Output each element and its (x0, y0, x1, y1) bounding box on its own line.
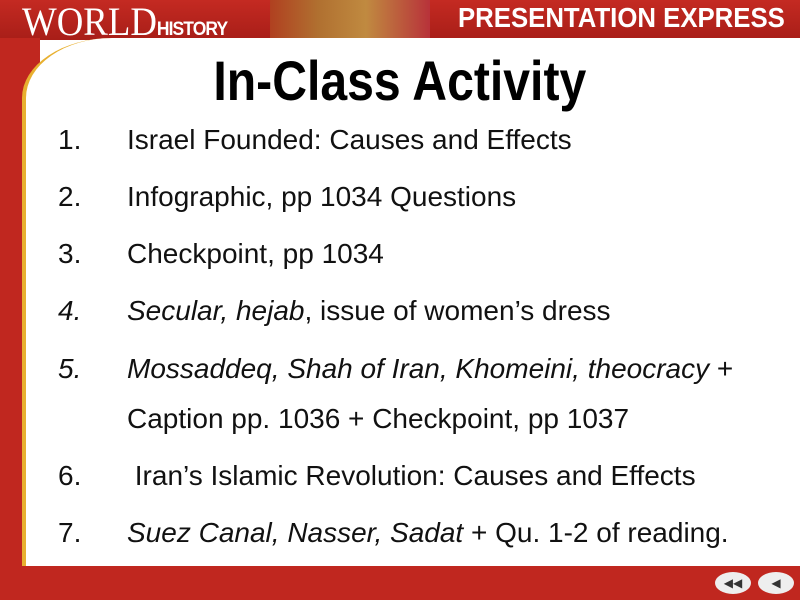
list of activities: Israel Founded: Causes and Effects (127, 124, 572, 155)
list of activities: Secular, hejab, issue of women’s dress (127, 295, 611, 326)
logo: World History: WORLDHISTORY (22, 0, 227, 44)
item 4: 4. (58, 295, 81, 326)
item 1 (58, 124, 572, 155)
item 5: 5. (58, 353, 81, 384)
item 1: 1. (58, 124, 81, 155)
button: back: ◀ (771, 576, 781, 590)
list of activities: Caption pp. 1036 + Checkpoint, pp 1037 (127, 403, 629, 434)
item 7: 7. (58, 517, 81, 548)
item 6: 6. (58, 460, 81, 491)
button: back (758, 572, 794, 594)
header image band (270, 0, 430, 40)
header label: Presentation Express: PRESENTATION EXPRESS (458, 2, 785, 33)
item 7 (58, 517, 729, 548)
item 2: 2. (58, 181, 81, 212)
bottom bar (0, 566, 800, 600)
item 2 (58, 181, 516, 212)
button: rewind (715, 572, 751, 594)
button: rewind: ◀◀ (724, 576, 742, 590)
list of activities: Infographic, pp 1034 Questions (127, 181, 516, 212)
list of activities: Iran’s Islamic Revolution: Causes and Effects (135, 460, 696, 491)
item 4 (58, 295, 611, 326)
list of activities (58, 124, 733, 548)
list of activities: Suez Canal, Nasser, Sadat + Qu. 1-2 of reading. (127, 517, 729, 548)
title: In-Class Activity (214, 49, 586, 112)
item 6 (58, 460, 696, 491)
header bar (0, 0, 800, 40)
item 3: 3. (58, 238, 81, 269)
item 3 (58, 238, 384, 269)
list of activities: Checkpoint, pp 1034 (127, 238, 384, 269)
item 5 (58, 353, 733, 384)
list of activities: Mossaddeq, Shah of Iran, Khomeini, theocracy + (127, 353, 733, 384)
left red border (0, 38, 40, 568)
